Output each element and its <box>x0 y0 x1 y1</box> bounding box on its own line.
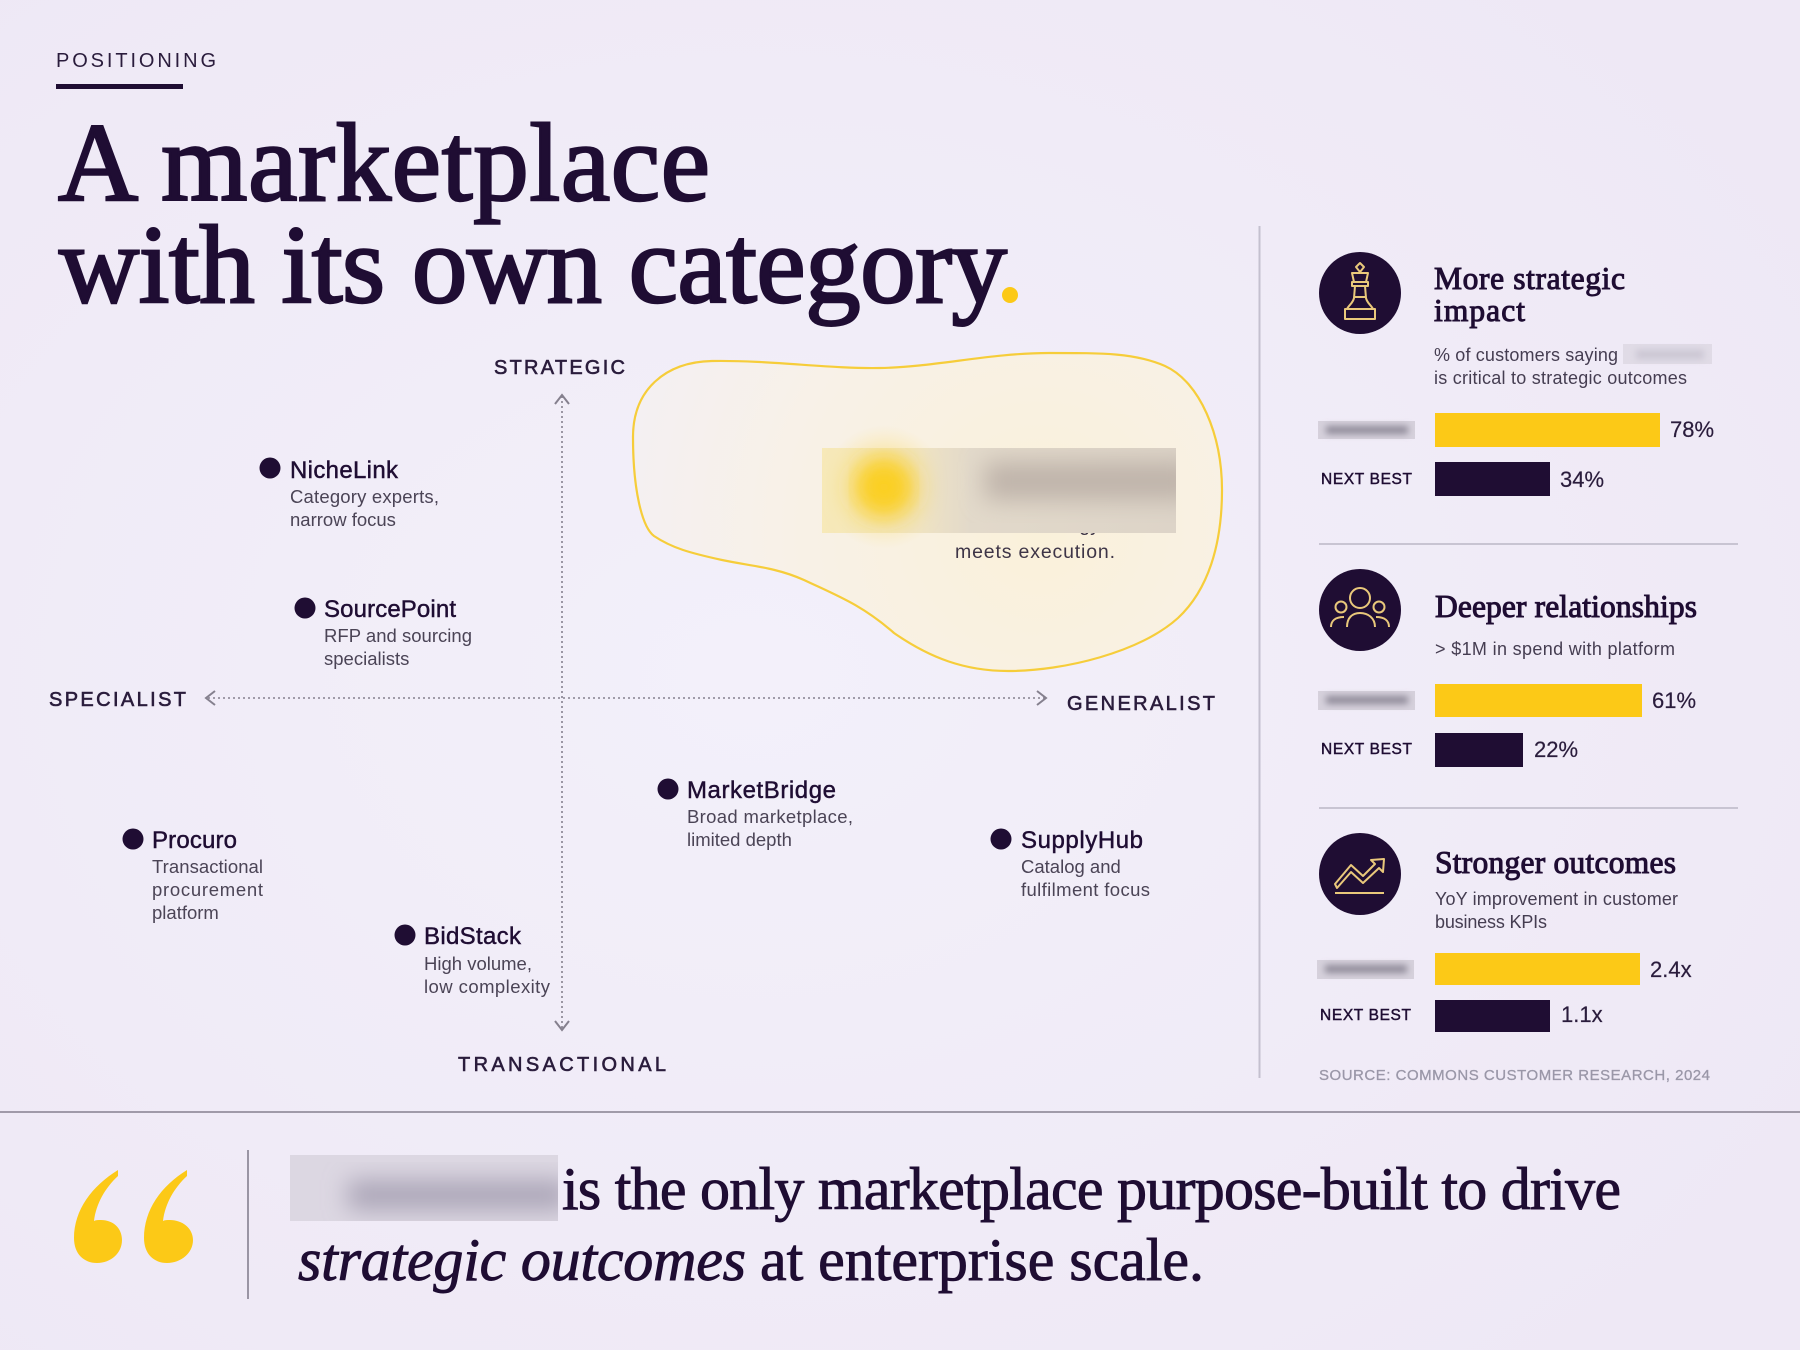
description: is critical to strategic outcomes <box>1434 368 1687 388</box>
redacted row label <box>1317 960 1414 979</box>
icon: chess king <box>1319 252 1401 334</box>
title: A marketplace <box>58 102 710 225</box>
competitor: BidStack: BidStack <box>424 923 522 950</box>
competitor: Procuro <box>122 827 263 923</box>
redacted brand name <box>1623 344 1712 364</box>
description: % of customers saying <box>1434 345 1618 365</box>
bar: brand 78% <box>1435 413 1660 447</box>
description: business KPIs <box>1435 912 1547 932</box>
value 78%: 78% <box>1670 417 1714 442</box>
competitor: NicheLink <box>260 457 439 530</box>
value 2.4x: 2.4x <box>1650 957 1692 982</box>
quote line 1: is the only marketplace purpose-built to drive <box>562 1156 1621 1222</box>
competitor: Procuro: Transactional <box>152 856 263 877</box>
redacted brand box <box>822 448 1195 533</box>
competitor: MarketBridge <box>658 777 853 850</box>
competitor: NicheLink: Category experts, <box>290 486 439 507</box>
axis label: transactional: TRANSACTIONAL <box>458 1054 666 1076</box>
value 22%: 22% <box>1534 737 1578 762</box>
panel: deeper relationships <box>1318 569 1697 767</box>
pull quote <box>290 1155 1621 1293</box>
value 34%: 34% <box>1560 467 1604 492</box>
panel: stronger outcomes <box>1317 833 1692 1032</box>
row label: next best: NEXT BEST <box>1321 741 1413 758</box>
eyebrow label: POSITIONING <box>56 50 216 72</box>
competitor: MarketBridge: MarketBridge <box>687 777 836 804</box>
description: YoY improvement in customer <box>1435 889 1678 909</box>
vertical axis <box>555 395 569 1030</box>
bar: brand 2.4x <box>1435 953 1640 985</box>
axis label: specialist: SPECIALIST <box>49 689 186 711</box>
positioning map <box>49 353 1222 1076</box>
heading: Stronger outcomes <box>1435 845 1676 880</box>
axis label: strategic: STRATEGIC <box>494 357 625 379</box>
bar: brand 61% <box>1435 684 1642 717</box>
axis label: generalist: GENERALIST <box>1067 693 1215 715</box>
title: with its own category <box>59 204 1008 327</box>
blob caption: meets execution. <box>955 541 1115 563</box>
competitor: SupplyHub: fulfilment focus <box>1021 879 1150 900</box>
source note: SOURCE: COMMONS CUSTOMER RESEARCH, 2024 <box>1319 1067 1710 1084</box>
competitor: SourcePoint: specialists <box>324 648 409 669</box>
competitor: SourcePoint <box>294 596 472 669</box>
competitor: SourcePoint: SourcePoint <box>324 596 456 623</box>
bar: next best 34% <box>1435 462 1550 496</box>
heading <box>1434 261 1625 328</box>
competitor: SupplyHub: Catalog and <box>1021 856 1121 877</box>
horizontal axis <box>206 691 1046 705</box>
redacted row label <box>1318 421 1415 439</box>
panel: more strategic impact <box>1318 252 1714 496</box>
competitor: SourcePoint: RFP and sourcing <box>324 625 472 646</box>
heading: More strategic <box>1434 261 1625 296</box>
competitor: SupplyHub <box>990 827 1150 900</box>
right column rule <box>1258 226 1260 1078</box>
title <box>58 102 1018 327</box>
competitor: NicheLink: narrow focus <box>290 509 396 530</box>
competitor: BidStack <box>394 923 551 997</box>
competitor: Procuro: Procuro <box>152 827 237 854</box>
description: > $1M in spend with platform <box>1435 639 1675 659</box>
icon: people <box>1319 569 1401 651</box>
eyebrow label <box>56 50 216 89</box>
row label: next best: NEXT BEST <box>1321 471 1413 488</box>
heading: impact <box>1434 293 1525 328</box>
bar: next best 22% <box>1435 733 1523 767</box>
heading: Deeper relationships <box>1435 589 1697 624</box>
redacted row label <box>1318 691 1415 710</box>
competitor: MarketBridge: limited depth <box>687 829 792 850</box>
competitor: MarketBridge: Broad marketplace, <box>687 806 853 827</box>
icon: growth chart <box>1319 833 1401 915</box>
quote line 2 italic: strategic outcomes <box>298 1227 746 1293</box>
competitor: BidStack: High volume, <box>424 953 532 974</box>
blob caption <box>955 514 1115 563</box>
competitor: Procuro: procurement <box>152 879 263 900</box>
competitor: Procuro: platform <box>152 902 219 923</box>
description <box>1434 345 1687 388</box>
bar: next best 1.1x <box>1435 1000 1550 1032</box>
competitor: SupplyHub: SupplyHub <box>1021 827 1143 854</box>
value 61%: 61% <box>1652 688 1696 713</box>
competitor: BidStack: low complexity <box>424 976 551 997</box>
value 1.1x: 1.1x <box>1561 1002 1603 1027</box>
description <box>1435 889 1678 932</box>
competitor: NicheLink: NicheLink <box>290 457 399 484</box>
blob caption: where strategy <box>971 514 1100 536</box>
yellow halo <box>822 425 946 549</box>
redacted brand name <box>290 1155 568 1221</box>
quote line 2 roman: at enterprise scale. <box>760 1227 1204 1293</box>
highlighted region blob <box>633 353 1222 671</box>
row label: next best: NEXT BEST <box>1320 1007 1412 1024</box>
icon: quotation marks <box>74 1170 193 1263</box>
